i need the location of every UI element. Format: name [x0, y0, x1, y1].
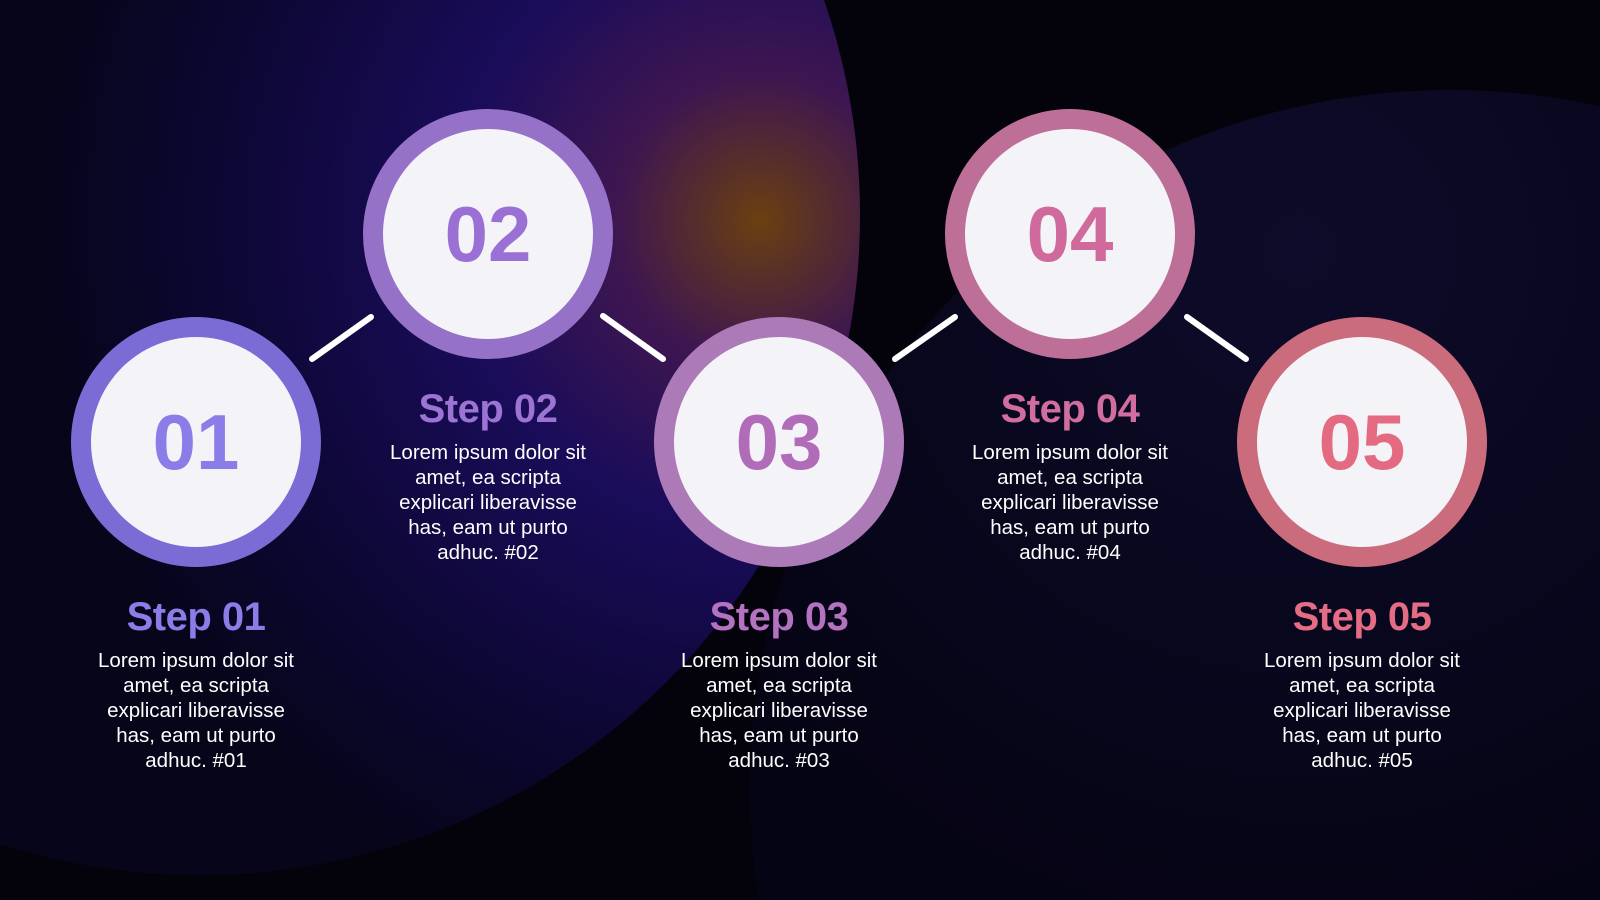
- text: step 05: adhuc. #05: [1311, 749, 1413, 772]
- text: step 04: explicari liberavisse: [981, 491, 1159, 514]
- circle 05: 05: [1319, 398, 1405, 486]
- text: step 02: Step 02: [419, 387, 557, 431]
- text: step 01: [98, 595, 294, 772]
- text: step 05: Lorem ipsum dolor sit: [1264, 649, 1460, 672]
- circle 03: 03: [736, 398, 822, 486]
- circle 02: [363, 109, 613, 359]
- text: step 04: Step 04: [1001, 387, 1139, 431]
- text: step 03: explicari liberavisse: [690, 699, 868, 722]
- text: step 02: Lorem ipsum dolor sit: [390, 441, 586, 464]
- circle 05: [1237, 317, 1487, 567]
- text: step 04: adhuc. #04: [1019, 541, 1121, 564]
- text: step 04: [972, 387, 1168, 564]
- text: step 03: [681, 595, 877, 772]
- text: step 01: has, eam ut purto: [116, 724, 276, 747]
- text: step 05: Step 05: [1293, 595, 1431, 639]
- text: step 04: Lorem ipsum dolor sit: [972, 441, 1168, 464]
- text: step 05: has, eam ut purto: [1282, 724, 1442, 747]
- text: step 05: [1264, 595, 1460, 772]
- text: step 05: amet, ea scripta: [1289, 674, 1435, 697]
- text: step 03: Lorem ipsum dolor sit: [681, 649, 877, 672]
- text: step 01: Step 01: [127, 595, 265, 639]
- text: step 01: Lorem ipsum dolor sit: [98, 649, 294, 672]
- text: step 03: amet, ea scripta: [706, 674, 852, 697]
- circle 01: 01: [153, 398, 239, 486]
- circle 04: [945, 109, 1195, 359]
- text: step 01: adhuc. #01: [145, 749, 247, 772]
- circle 02: 02: [445, 190, 531, 278]
- text: step 02: explicari liberavisse: [399, 491, 577, 514]
- text: step 02: amet, ea scripta: [415, 466, 561, 489]
- circle 04: 04: [1027, 190, 1113, 278]
- text: step 04: has, eam ut purto: [990, 516, 1150, 539]
- text: step 01: amet, ea scripta: [123, 674, 269, 697]
- text: step 04: amet, ea scripta: [997, 466, 1143, 489]
- text: step 03: Step 03: [710, 595, 848, 639]
- text: step 03: adhuc. #03: [728, 749, 830, 772]
- text: step 02: has, eam ut purto: [408, 516, 568, 539]
- circle 03: [654, 317, 904, 567]
- text: step 03: has, eam ut purto: [699, 724, 859, 747]
- text: step 01: explicari liberavisse: [107, 699, 285, 722]
- circle 01: [71, 317, 321, 567]
- text: step 02: [390, 387, 586, 564]
- text: step 05: explicari liberavisse: [1273, 699, 1451, 722]
- text: step 02: adhuc. #02: [437, 541, 539, 564]
